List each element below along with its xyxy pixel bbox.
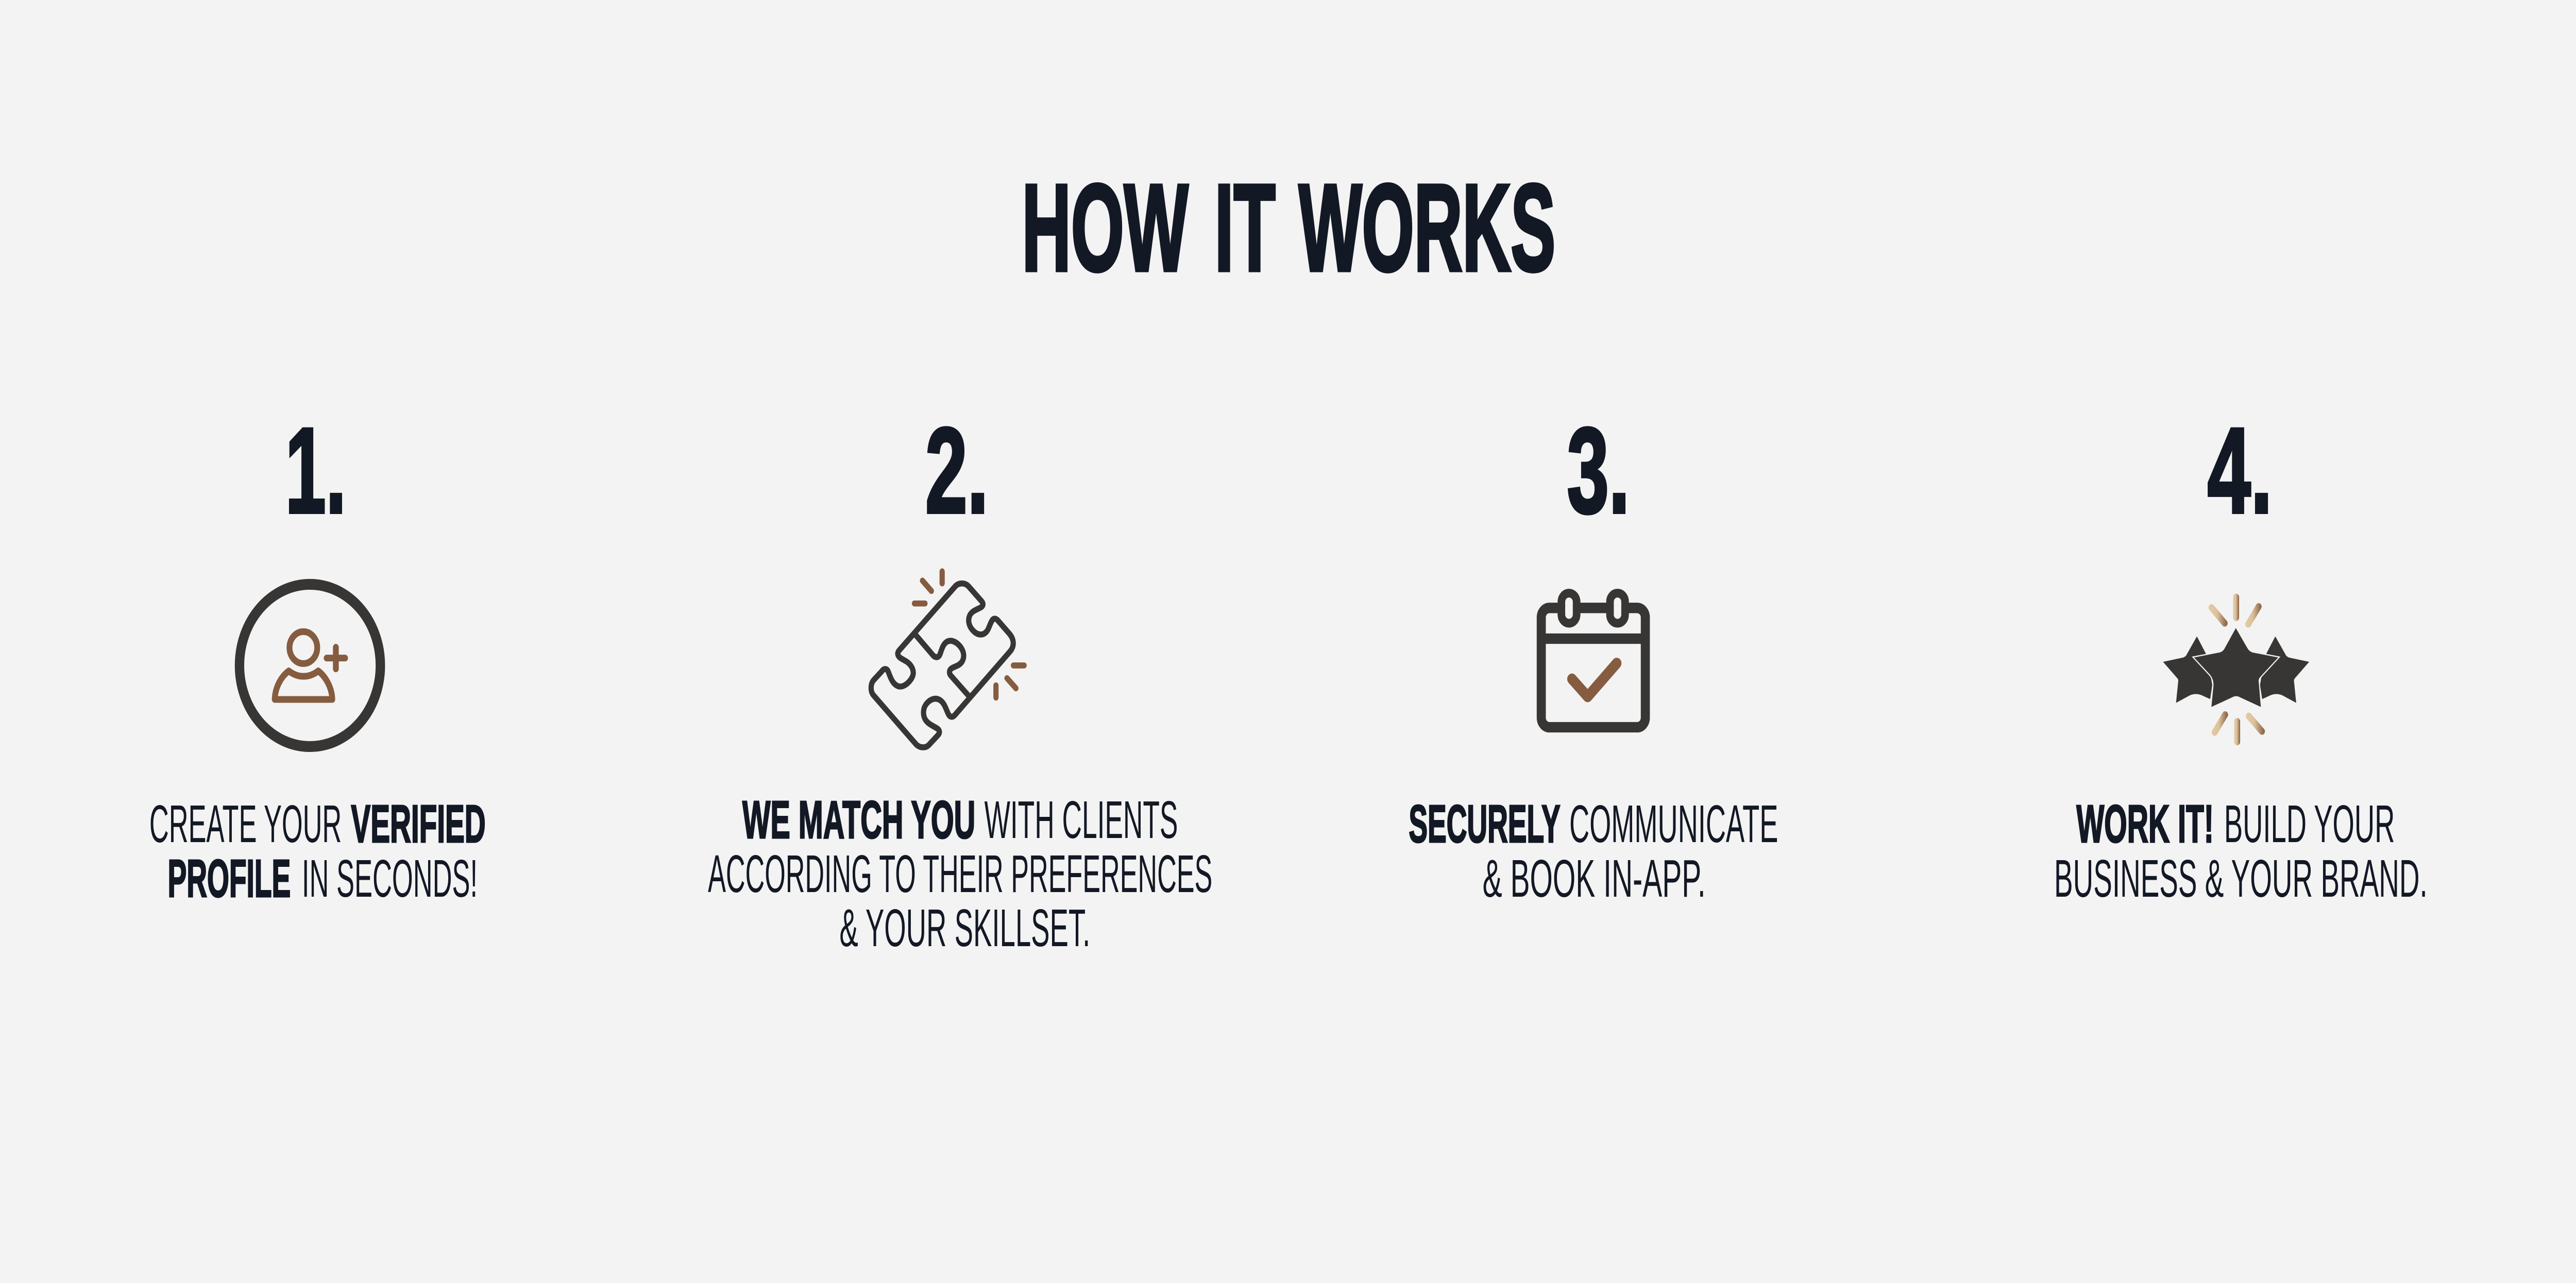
step 3 description (1409, 795, 1778, 908)
panel: step 3 (1409, 402, 1778, 908)
step number 3: 3. (1567, 402, 1630, 538)
title: IT (1215, 159, 1276, 297)
step 2 description (708, 791, 1212, 957)
step number 4: 4. (2208, 402, 2273, 538)
step 4 description: BUILD YOUR (2224, 795, 2395, 853)
step 1 description: VERIFIED (351, 795, 486, 853)
icon: puzzle pieces (871, 571, 1024, 747)
step number 1: 1. (285, 402, 346, 538)
step 1 description: IN SECONDS! (302, 849, 478, 908)
panel: step 1 (149, 402, 486, 908)
title: HOW (1022, 159, 1188, 297)
step 2 description: WITH CLIENTS (985, 791, 1178, 849)
step number 2: 2. (925, 402, 988, 538)
icon: calendar with check (1541, 593, 1646, 727)
panel: step 4 (2054, 402, 2428, 908)
icon: add user profile (240, 584, 380, 747)
step 4 description (2054, 795, 2428, 908)
panel: step 2 (708, 402, 1212, 957)
step 4 description: WORK IT! (2076, 795, 2214, 853)
step 2 description: & YOUR SKILLSET. (839, 899, 1090, 957)
step 2 description: ACCORDING TO THEIR PREFERENCES (708, 845, 1212, 903)
step 3 description: & BOOK IN-APP. (1483, 849, 1706, 908)
title: WORKS (1299, 159, 1555, 297)
step 1 description (149, 795, 486, 908)
title (1022, 159, 1555, 297)
step 3 description: SECURELY (1409, 795, 1561, 853)
step 2 description: WE MATCH YOU (742, 791, 975, 849)
step 1 description: PROFILE (168, 849, 291, 908)
step 3 description: COMMUNICATE (1569, 795, 1778, 853)
icon: three stars with rays (2163, 597, 2309, 742)
step 1 description: CREATE YOUR (149, 795, 342, 853)
